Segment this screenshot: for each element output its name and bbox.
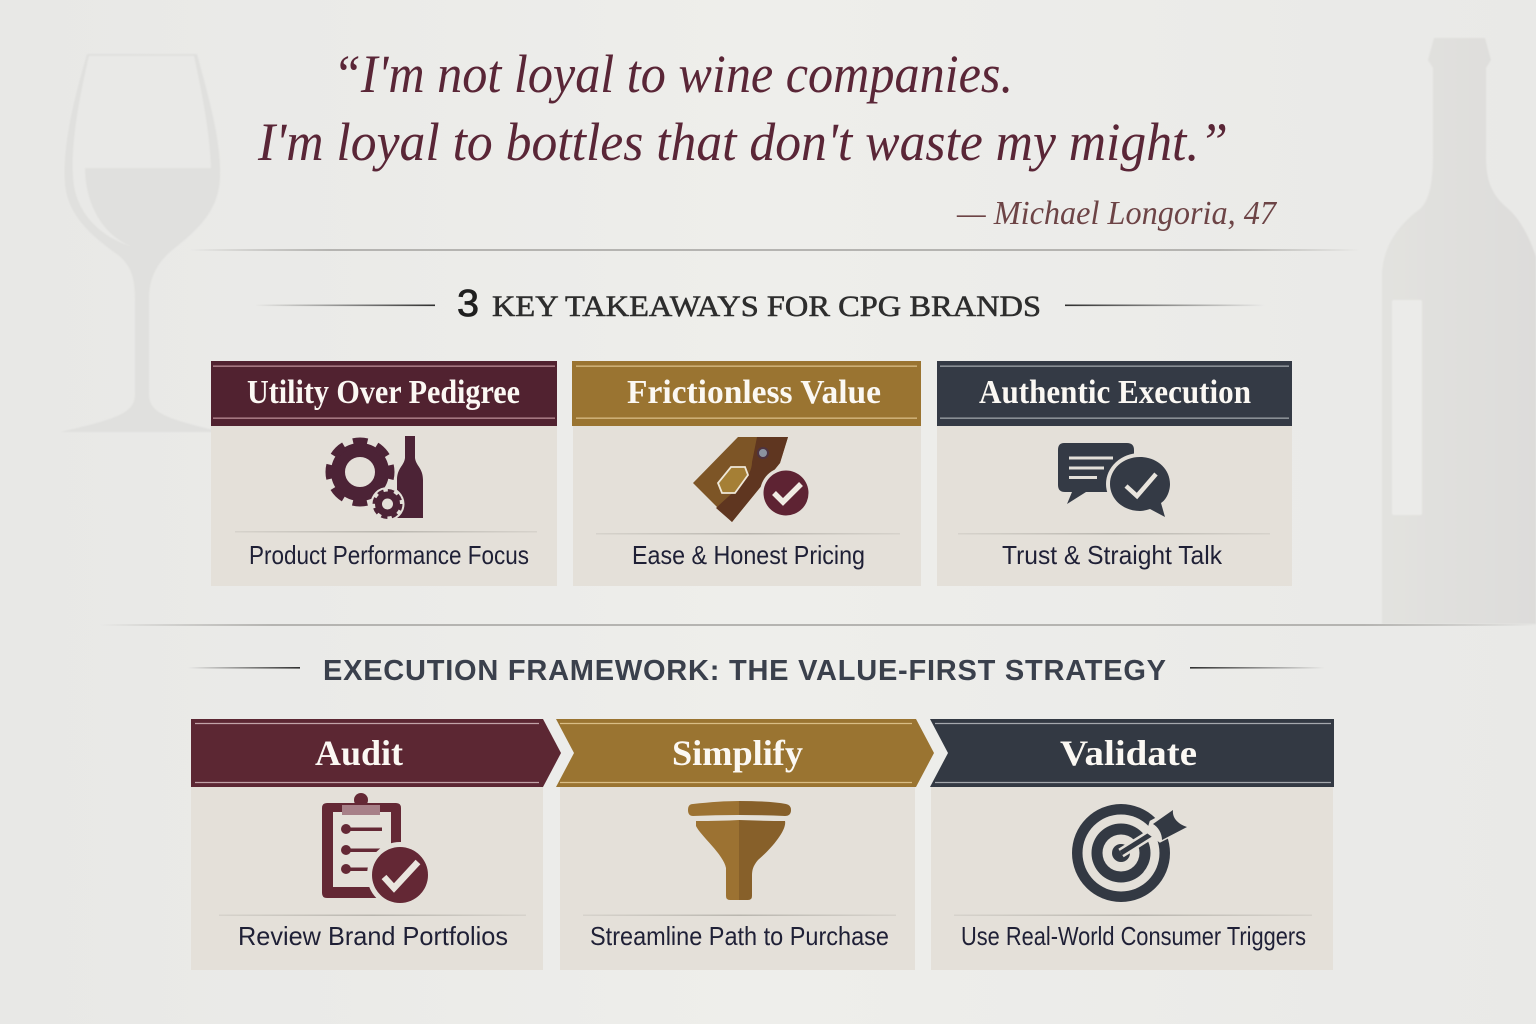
- heading: authentic execution: Authentic Execution: [979, 374, 1251, 411]
- icon: gears and bottle: [330, 436, 423, 521]
- heading: key takeaways: [255, 283, 1265, 325]
- icon: speech bubbles with check: [1058, 443, 1174, 517]
- panel: authentic execution: [937, 361, 1292, 586]
- panel: audit: [191, 719, 561, 970]
- background wine glass silhouette: [60, 54, 222, 432]
- label: use real-world consumer triggers: Use Real-World Consumer Triggers: [961, 921, 1306, 951]
- icon: target with arrow: [1072, 804, 1187, 902]
- background wine bottle silhouette: [1382, 38, 1536, 624]
- heading: execution framework: EXECUTION FRAMEWORK: THE VALUE-FIRST STRATEGY: [323, 655, 1166, 687]
- icon: price tag with check: [693, 437, 812, 522]
- label: ease and honest pricing: Ease & Honest Pricing: [632, 540, 865, 570]
- quote attribution: — Michael Longoria, 47: [956, 195, 1278, 232]
- heading: key takeaways: 3: [457, 283, 479, 325]
- icon: funnel: [688, 801, 791, 900]
- heading: frictionless value: Frictionless Value: [627, 374, 881, 411]
- label: review brand portfolios: Review Brand Portfolios: [238, 921, 508, 951]
- panel: frictionless value: [572, 361, 921, 586]
- quote: I'm loyal to bottles that don't waste my might.”: [257, 112, 1228, 172]
- quote: [257, 44, 1228, 172]
- quote: “I'm not loyal to wine companies.: [333, 44, 1013, 104]
- heading: audit: Audit: [315, 733, 403, 773]
- heading: key takeaways: KEY TAKEAWAYS FOR CPG BRANDS: [492, 290, 1041, 323]
- panel: utility over pedigree: [211, 361, 557, 586]
- label: product performance focus: Product Performance Focus: [249, 540, 529, 570]
- label: streamline path to purchase: Streamline Path to Purchase: [590, 921, 889, 951]
- icon: clipboard with check: [322, 793, 433, 908]
- heading: utility over pedigree: Utility Over Pedigree: [247, 374, 520, 411]
- panel: simplify: [556, 719, 934, 970]
- panel: validate: [930, 719, 1334, 970]
- heading: validate: Validate: [1060, 733, 1197, 773]
- heading: simplify: Simplify: [672, 733, 803, 773]
- label: trust and straight talk: Trust & Straight Talk: [1002, 540, 1223, 570]
